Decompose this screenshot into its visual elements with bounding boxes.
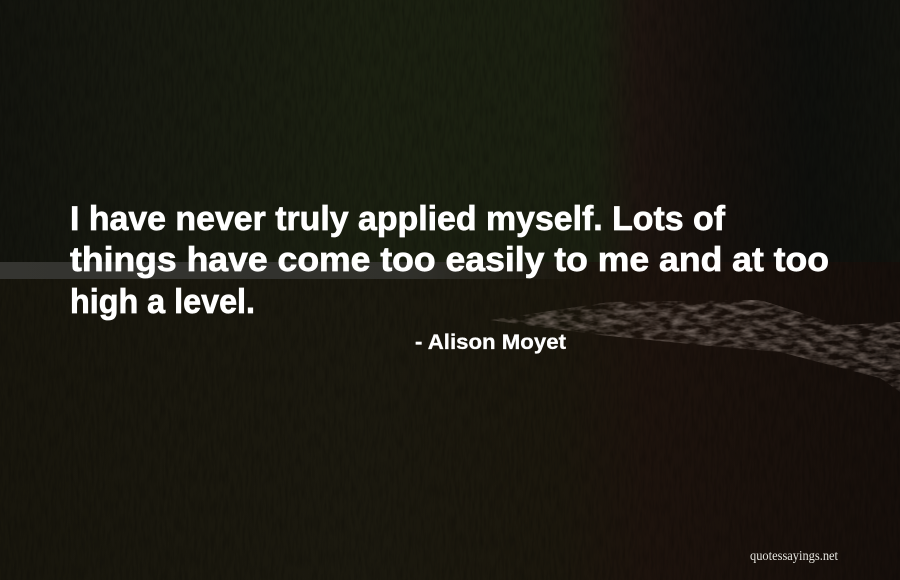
watermark: quotessayings.net bbox=[750, 549, 838, 564]
quote text: I have never truly applied myself. Lots of bbox=[70, 200, 726, 238]
quote text: things have come too easily to me and at too bbox=[70, 241, 829, 279]
author attribution: - Alison Moyet bbox=[415, 331, 566, 354]
quote text bbox=[70, 200, 829, 321]
quote text: high a level. bbox=[70, 283, 255, 321]
